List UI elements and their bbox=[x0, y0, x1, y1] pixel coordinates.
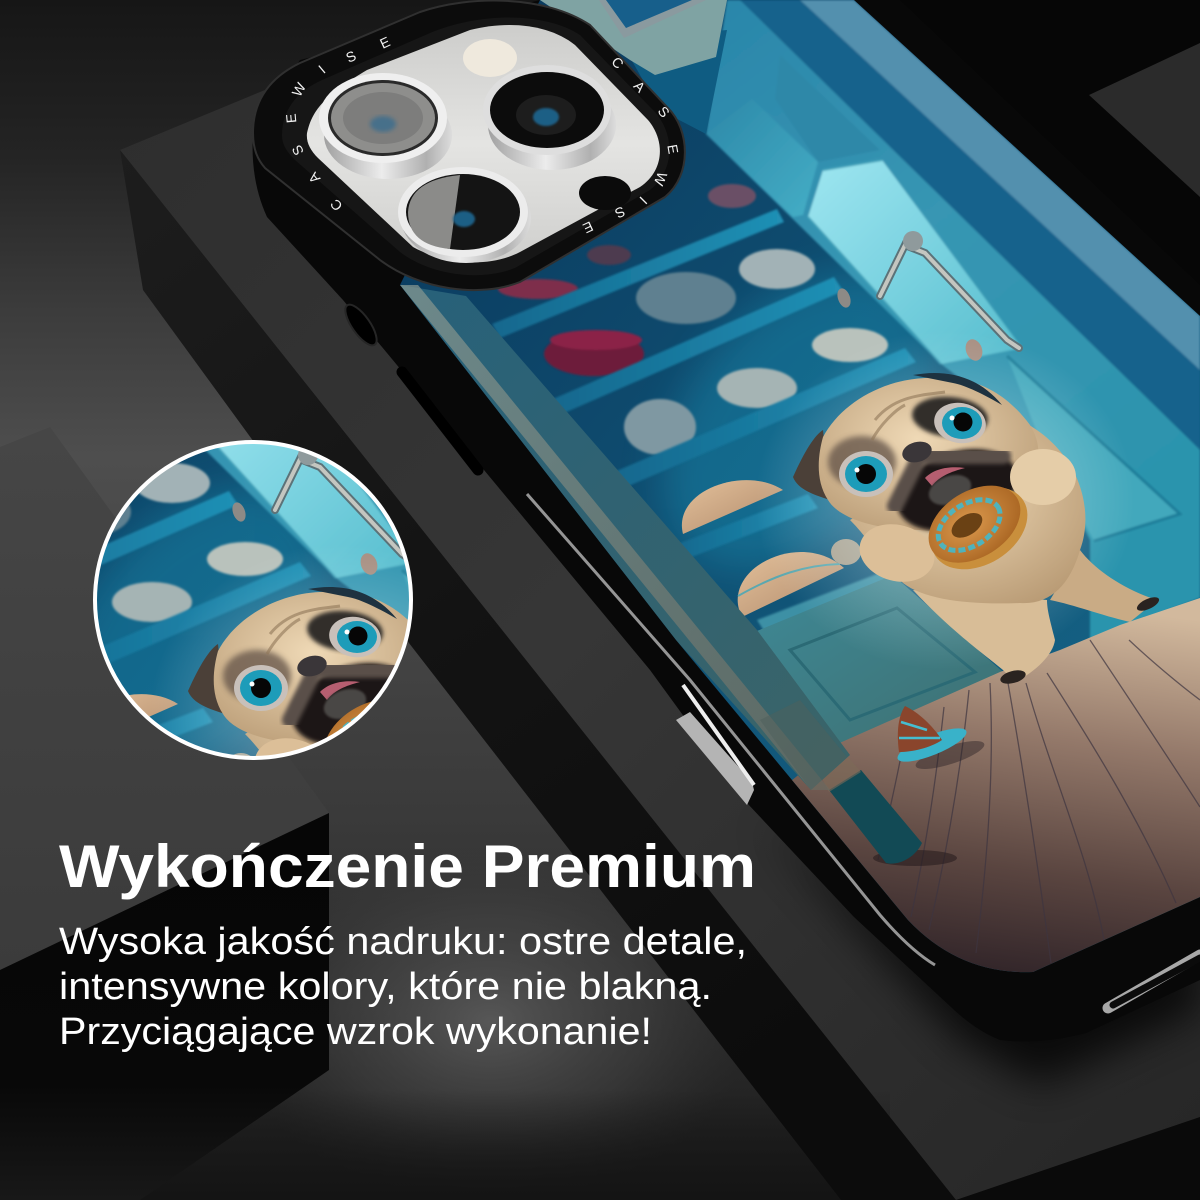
background: ground glow bbox=[230, 844, 750, 1200]
brand text ring: S bbox=[288, 142, 307, 158]
body text: intensywne kolory, które nie blakną. bbox=[59, 966, 712, 1008]
brand text ring: E bbox=[283, 113, 299, 124]
phone screen artwork bbox=[380, 0, 1200, 980]
glass frame edge bbox=[400, 285, 830, 790]
background: ground bottom fade bbox=[130, 1090, 890, 1200]
body text bbox=[59, 921, 747, 1053]
silver button highlight bbox=[683, 685, 754, 785]
glass window bbox=[307, 25, 660, 262]
magnified detail circle bbox=[93, 440, 413, 760]
body text: Przyciągające wzrok wykonanie! bbox=[59, 1011, 652, 1053]
glass sheen bottom bbox=[760, 700, 847, 790]
lens: bottom bbox=[398, 167, 531, 263]
brand text ring: S bbox=[655, 103, 673, 121]
brand text ring: W bbox=[288, 79, 309, 99]
background: main block side face bbox=[120, 150, 956, 1200]
inner ring bbox=[282, 17, 669, 275]
shelf wall blue bbox=[632, 30, 727, 134]
background: phone shadow bbox=[760, 820, 1200, 1085]
side button slit bbox=[402, 372, 478, 470]
picture frame top bbox=[599, 0, 706, 38]
background: left block front face bbox=[0, 813, 329, 1200]
lens: top right bbox=[483, 65, 616, 170]
brand text ring: A bbox=[304, 169, 323, 187]
brand text ring: E bbox=[580, 218, 596, 237]
camera island bbox=[253, 1, 685, 290]
brand text ring: I bbox=[637, 194, 651, 208]
sensor hole bbox=[579, 176, 631, 210]
body text: Wysoka jakość nadruku: ostre detale, bbox=[59, 921, 747, 963]
brand text ring: C bbox=[608, 54, 627, 72]
picture top bbox=[606, 0, 692, 28]
bottom port bbox=[1108, 955, 1200, 1008]
silver button bbox=[676, 712, 754, 805]
background: top right dark bbox=[640, 0, 1200, 520]
brand text ring: C bbox=[327, 196, 346, 214]
brand text ring: E bbox=[664, 143, 682, 155]
lens: top left bbox=[319, 73, 452, 179]
phone body bbox=[253, 0, 1200, 1041]
brand text ring: E bbox=[377, 33, 393, 52]
brand text ring: A bbox=[631, 78, 649, 96]
bottom port opening bbox=[1113, 958, 1200, 1005]
brand text ring: S bbox=[612, 203, 628, 222]
brand text ring: S bbox=[343, 47, 359, 66]
brand text ring bbox=[283, 33, 682, 237]
title: Wykończenie Premium bbox=[59, 833, 756, 900]
background: left block top face bbox=[0, 427, 329, 970]
background: bottom right dark corner bbox=[956, 1117, 1200, 1200]
flash bbox=[463, 39, 517, 77]
pale top wall bbox=[540, 0, 727, 75]
phone edge highlight bbox=[527, 494, 935, 965]
glass frame band bbox=[400, 285, 850, 790]
brand text ring: I bbox=[315, 62, 328, 77]
outer black ring bbox=[253, 1, 685, 290]
brand text ring: W bbox=[650, 170, 671, 189]
background: top right block bbox=[1089, 43, 1200, 197]
side hole bbox=[340, 300, 382, 350]
